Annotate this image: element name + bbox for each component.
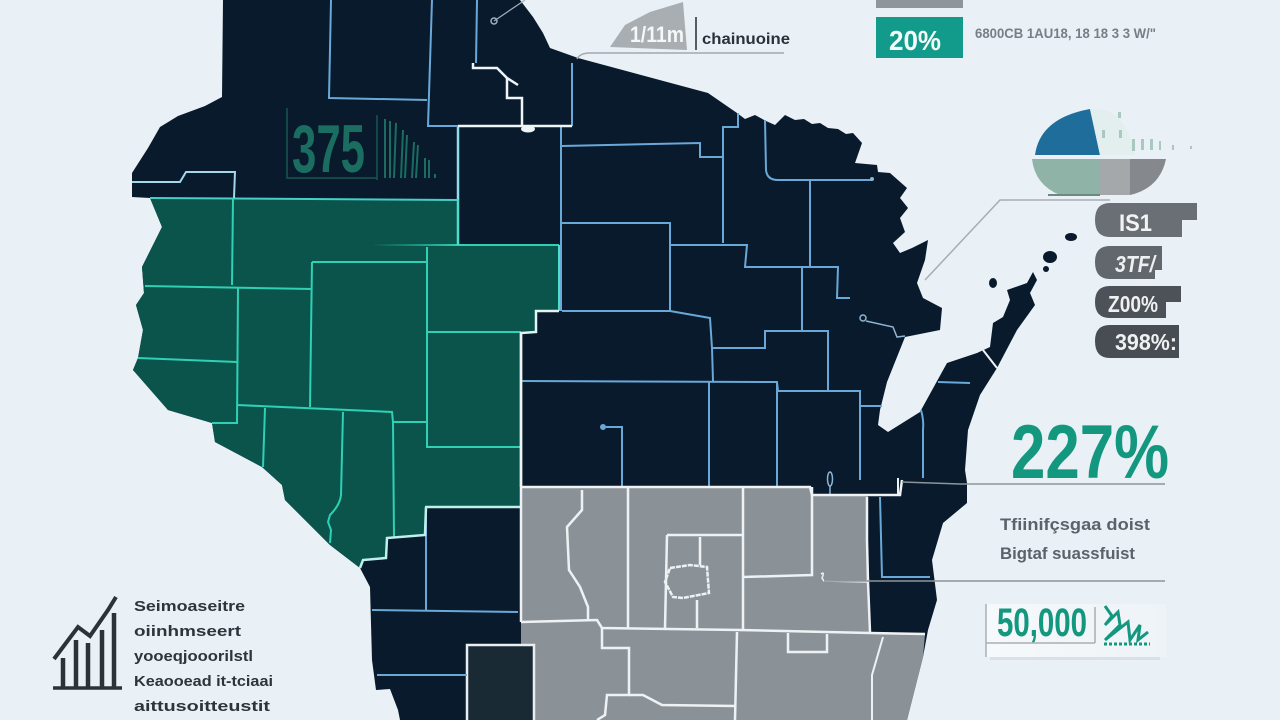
bottom-left text block: Seimoaseitre [134, 598, 245, 615]
stat box: top grey bar [876, 0, 963, 8]
description text [1000, 515, 1150, 563]
divider: upper callout line [902, 482, 1165, 484]
map: islands [989, 233, 1077, 288]
stat card: 50,000 [986, 601, 1166, 660]
divider: lower callout line [824, 580, 1165, 582]
map: grey region [521, 487, 925, 720]
bottom-left text block: aittusoitteustit [134, 698, 270, 715]
bottom-left text block: Keaooead it-tciaai [134, 673, 273, 690]
callout: top centre mini chart and label [577, 2, 790, 59]
pie: sage slice [1032, 159, 1100, 195]
bottom-left text block: yooeqjooorilstl [134, 648, 253, 665]
map label: 375 stat: 375 [292, 111, 365, 187]
pie chart [1032, 109, 1192, 196]
tag: IS1 [1095, 203, 1197, 237]
pie: grey slices [1100, 159, 1130, 195]
map: dark land silhouette [132, 0, 1037, 720]
map: white northern border [458, 63, 997, 368]
map: light boundary edges [132, 172, 559, 568]
tag: IS1: IS1 [1119, 210, 1152, 237]
stat box: 20% teal [876, 17, 963, 58]
map: grey county borders [521, 333, 925, 720]
icon: rising bar chart [53, 597, 122, 688]
map: lower dark county box [467, 645, 534, 720]
stat box: 20% teal: 20% [889, 25, 941, 56]
bottom-left text block [134, 598, 273, 715]
big stat: 227%: 227% [1011, 410, 1169, 495]
stat tags [1095, 203, 1197, 358]
pie: pale dotted slice [1090, 109, 1135, 155]
map [132, 0, 1077, 720]
tag: 3TF% [1095, 246, 1162, 279]
map: blue county borders [329, 0, 970, 675]
tag: 200%: Z00% [1108, 291, 1158, 317]
description text: Tfiinifçsgaa doist [1000, 515, 1150, 534]
callout: top centre mini chart and label: chainuoine [702, 31, 790, 48]
stat card: 50,000: 50,000 [997, 601, 1087, 645]
icon: teal scribble chart [1104, 606, 1150, 644]
map: green county borders [138, 198, 559, 543]
callout leader line to map [925, 200, 1110, 280]
tag: 3TF%: 3TF/ [1115, 251, 1157, 277]
tag: 398% [1095, 325, 1179, 358]
callout: top centre mini chart and label: 1/11m [630, 22, 684, 47]
tag: 200% [1095, 286, 1181, 318]
map: green region [133, 198, 559, 568]
stat caption: 6800CB 1AU18, 18 18 3 3 W/" [975, 25, 1156, 41]
pie: blue slice [1035, 109, 1100, 155]
bottom-left text block: oiinhmseert [134, 623, 241, 640]
tag: 398%: 398%: [1115, 329, 1177, 355]
description text: Bigtaf suassfuist [1000, 544, 1135, 563]
